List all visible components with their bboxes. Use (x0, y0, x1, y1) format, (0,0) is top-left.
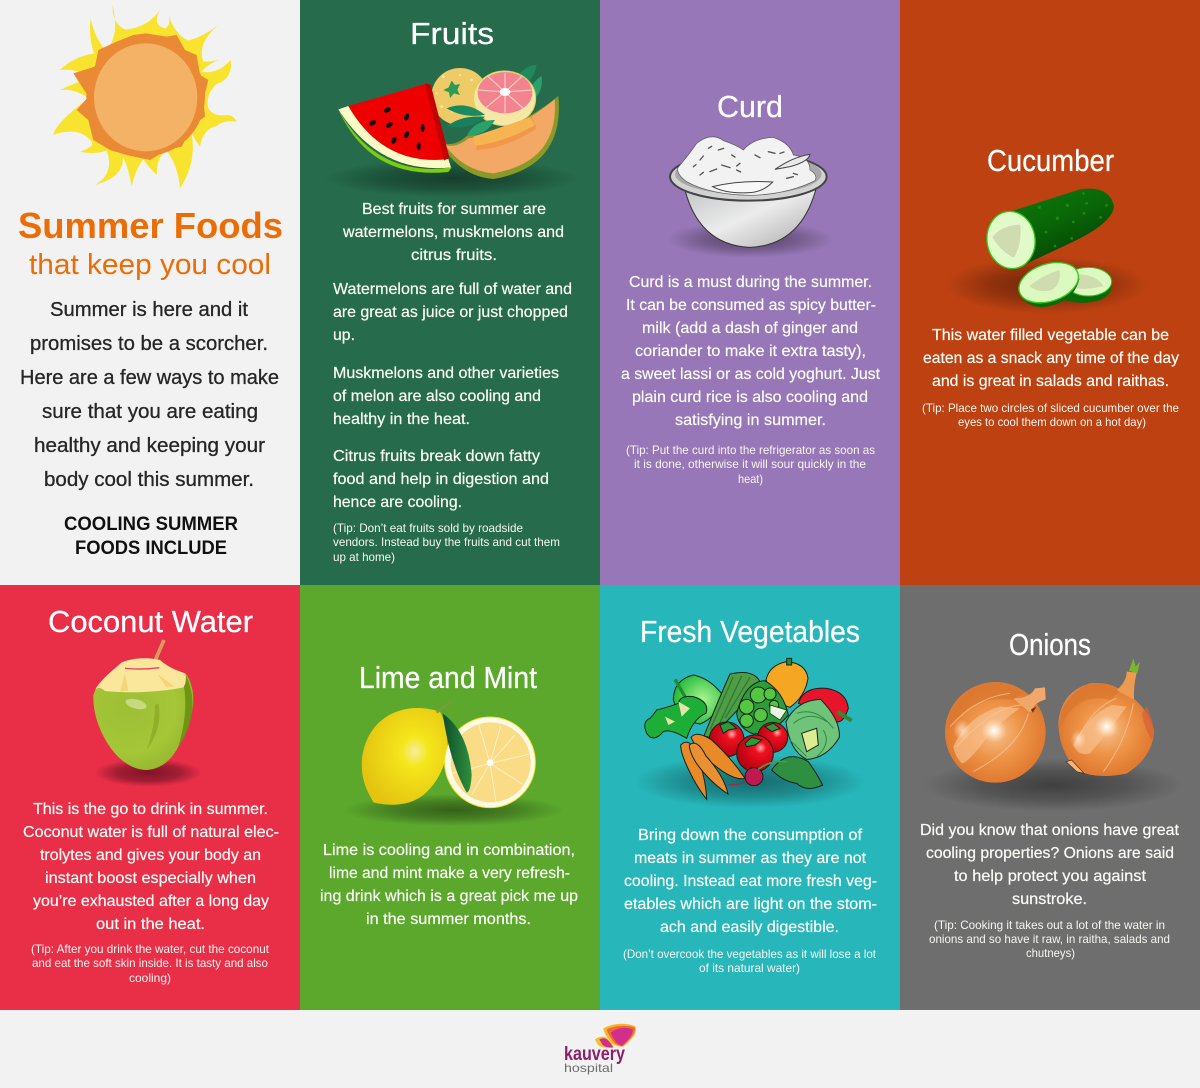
tip: vegetables: (Don’t overcook the vegetables as it will lose a lot (623, 947, 877, 961)
text: best fruits intro: citrus fruits. (411, 247, 497, 264)
heading: Cucumber: Cucumber (987, 143, 1114, 178)
text: vegetables description: cooling. Instead eat more fresh veg- (624, 873, 877, 890)
tip: curd: (Tip: Put the curd into the refrigerator as soon as (626, 443, 875, 457)
icon: sun (53, 5, 237, 188)
tip: cucumber: eyes to cool them down on a hot day) (958, 415, 1146, 429)
text: citrus fruits: Citrus fruits break down fatty (333, 448, 540, 465)
text: curd description: satisfying in summer. (675, 412, 826, 429)
heading: Onions: Onions (1009, 627, 1091, 662)
tip: onions: chutneys) (1026, 946, 1075, 960)
intro text: Here are a few ways to make (20, 367, 279, 389)
heading: Fresh Vegetables: Fresh Vegetables (640, 614, 860, 649)
text: coconut water description: Coconut water is full of natural elec- (23, 824, 279, 841)
icon: logo petals (595, 1024, 636, 1048)
tip: fruits: up at home) (333, 550, 395, 564)
subheading: cooling summer foods include: COOLING SUMMER (64, 514, 238, 535)
intro text: sure that you are eating (42, 401, 258, 423)
tip: coconut water: cooling) (129, 971, 171, 985)
tip: cucumber: (Tip: Place two circles of sliced cucumber over the (922, 401, 1179, 415)
text: best fruits intro: watermelons, muskmelons and (342, 224, 564, 241)
text: vegetables description: meats in summer as they are not (634, 850, 867, 867)
text: best fruits intro (342, 201, 564, 264)
text: coconut water description: instant boost especially when (45, 870, 256, 887)
text: coconut water description: out in the heat. (96, 916, 205, 933)
text: curd description: a sweet lassi or as cold yoghurt. Just (621, 366, 881, 383)
text: vegetables description: Bring down the consumption of (638, 827, 863, 844)
icon: vegetables (633, 658, 867, 808)
text: best fruits intro: Best fruits for summer are (362, 201, 546, 218)
text: curd description: plain curd rice is also cooling and (632, 389, 868, 406)
tip: curd: heat) (738, 472, 763, 486)
panel: lime and mint (300, 585, 600, 1010)
tip: coconut water: and eat the soft skin inside. It is tasty and also (32, 956, 268, 970)
heading: Fruits: Fruits (410, 16, 494, 51)
text: vegetables description (624, 827, 877, 936)
tip: fruits: (Tip: Don’t eat fruits sold by roadside (333, 521, 523, 535)
text: lime and mint description: Lime is cooling and in combination, (323, 842, 575, 859)
text: muskmelons: of melon are also cooling and (333, 388, 541, 405)
text: vegetables description: ach and easily digestible. (660, 919, 839, 936)
tip: fruits (333, 521, 560, 564)
intro text: Summer is here and it (50, 299, 248, 321)
tip: cucumber (922, 401, 1179, 429)
panel: curd (600, 0, 900, 585)
text: citrus fruits: food and help in digestion and (333, 471, 549, 488)
text: curd description: It can be consumed as spicy butter- (626, 297, 876, 314)
logo text: kauvery: kauvery (564, 1044, 625, 1065)
text: watermelons (333, 281, 572, 344)
subheading: that keep you cool: that keep you cool (29, 249, 271, 281)
icon: onions (923, 658, 1183, 812)
tip: coconut water (31, 942, 270, 985)
heading: Coconut Water: Coconut Water (48, 604, 253, 639)
panel: coconut water (0, 585, 300, 1010)
text: muskmelons: Muskmelons and other varieties (333, 365, 559, 382)
text: lime and mint description: ing drink which is a great pick me up (320, 888, 578, 905)
icon: bowl of curd (667, 137, 833, 258)
icon: cucumber (947, 189, 1147, 313)
text: watermelons: up. (333, 327, 355, 344)
text: watermelons: are great as juice or just chopped (333, 304, 568, 321)
heading: Summer Foods: Summer Foods (18, 205, 283, 246)
text: citrus fruits: hence are cooling. (333, 494, 462, 511)
footer logo: kauvery hospital (564, 1024, 636, 1075)
text: coconut water description: trolytes and gives your body an (40, 847, 261, 864)
icon: coconut (93, 640, 202, 787)
text: coconut water description: you’re exhausted after a long day (33, 893, 269, 910)
text: watermelons: Watermelons are full of water and (333, 281, 572, 298)
intro text: healthy and keeping your (34, 435, 265, 457)
panel: fruits (300, 0, 600, 585)
text: onions description: to help protect you against (954, 868, 1147, 885)
subheading: cooling summer foods include: FOODS INCLUDE (75, 538, 227, 559)
tip: onions: onions and so have it raw, in raitha, salads and (929, 932, 1170, 946)
text: coconut water description (23, 801, 279, 933)
text: onions description: Did you know that onions have great (920, 822, 1180, 839)
tip: onions: (Tip: Cooking it takes out a lot of the water in (934, 918, 1165, 932)
text: cucumber description: eaten as a snack any time of the day (923, 350, 1179, 367)
text: curd description (621, 274, 881, 429)
panel: fresh vegetables (600, 585, 900, 1010)
tip: coconut water: (Tip: After you drink the water, cut the coconut (31, 942, 270, 956)
tip: vegetables: of its natural water) (699, 961, 800, 975)
heading: Lime and Mint: Lime and Mint (359, 660, 537, 695)
text: lime and mint description: lime and mint make a very refresh- (329, 865, 570, 882)
subheading: cooling summer foods include (64, 514, 238, 559)
tip: onions (929, 918, 1170, 960)
intro text: body cool this summer. (44, 469, 254, 491)
text: cucumber description (923, 327, 1179, 390)
tip: curd: it is done, otherwise it will sour quickly in the (634, 457, 866, 471)
text: curd description: milk (add a dash of ginger and (642, 320, 858, 337)
text: curd description: Curd is a must during the summer. (629, 274, 872, 291)
text: vegetables description: etables which are light on the stom- (624, 896, 877, 913)
heading: Curd: Curd (717, 89, 783, 124)
text: muskmelons (333, 365, 559, 428)
icon: lemon and slice with leaf (343, 702, 563, 826)
text: muskmelons: healthy in the heat. (333, 411, 470, 428)
panel: intro (0, 0, 300, 585)
text: cucumber description: and is great in salads and raithas. (932, 373, 1169, 390)
text: onions description: cooling properties? Onions are said (926, 845, 1174, 862)
text: lime and mint description (320, 842, 578, 928)
tip: fruits: vendors. Instead buy the fruits and cut them (333, 535, 560, 549)
panel: onions (900, 585, 1200, 1010)
text: lime and mint description: in the summer months. (366, 911, 531, 928)
text: onions description: sunstroke. (1012, 891, 1087, 908)
logo text: hospital: hospital (564, 1061, 613, 1075)
text: citrus fruits (333, 448, 549, 511)
icon: watermelon, grapefruit and melon (322, 65, 582, 198)
intro text (20, 299, 279, 491)
intro text: promises to be a scorcher. (30, 333, 268, 355)
tip: vegetables (623, 947, 877, 975)
panel: cucumber (900, 0, 1200, 585)
tip: curd (626, 443, 875, 486)
text: coconut water description: This is the go to drink in summer. (33, 801, 268, 818)
text: cucumber description: This water filled vegetable can be (932, 327, 1169, 344)
text: curd description: coriander to make it extra tasty), (635, 343, 866, 360)
text: onions description (920, 822, 1180, 908)
